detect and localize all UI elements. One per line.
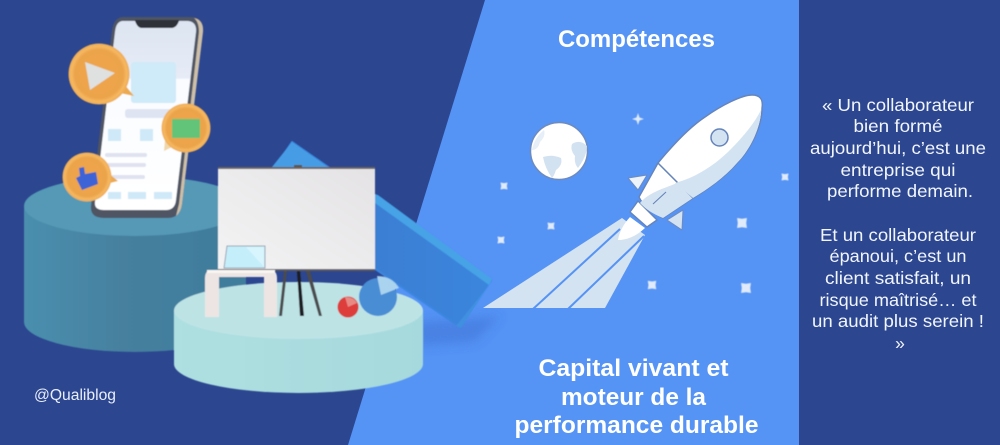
fins xyxy=(628,175,647,190)
heading: Capital vivant et moteur de la performance durable xyxy=(514,355,758,439)
panel: quote navy column xyxy=(799,0,1000,445)
whiteboard on easel xyxy=(218,165,375,316)
mint cylinder platform xyxy=(174,282,423,393)
flame xyxy=(618,217,645,240)
quote text block: client satisfait, un xyxy=(825,268,971,288)
quote text block: performe demain. xyxy=(827,181,973,201)
quote text block: » xyxy=(895,333,905,353)
heading: Capital vivant et moteur de la performance durable: performance durable xyxy=(514,412,758,439)
exhaust trails xyxy=(483,218,645,309)
window xyxy=(711,129,728,146)
illustration: planet earth xyxy=(530,122,588,180)
heading: Capital vivant et moteur de la performance durable: moteur de la xyxy=(561,384,707,411)
heading: Compétences: Compétences xyxy=(558,26,715,53)
heading: Capital vivant et moteur de la performance durable: Capital vivant et xyxy=(538,355,728,382)
label: @Qualiblog: @Qualiblog xyxy=(34,387,116,404)
icon: thumbs-up bubble xyxy=(62,152,118,202)
illustration: rocket xyxy=(483,95,762,309)
quote text block: épanoui, c’est un xyxy=(830,246,966,266)
quote text block: « Un collaborateur xyxy=(822,95,974,115)
quote text block: un audit plus serein ! xyxy=(812,311,984,331)
illustration: 3D training scene xyxy=(24,17,500,393)
lower body xyxy=(639,163,693,218)
upper body xyxy=(658,95,762,198)
icon: mail bubble xyxy=(162,104,210,152)
decorative stars xyxy=(494,113,792,298)
quote text block: bien formé xyxy=(854,116,942,136)
quote text block: Et un collaborateur xyxy=(820,225,976,245)
teal cylinder platform xyxy=(24,176,246,352)
white desk with laptop xyxy=(205,246,277,317)
quote text block: aujourd’hui, c’est une xyxy=(810,138,986,158)
quote text block xyxy=(810,95,986,353)
smartphone xyxy=(91,17,203,218)
nozzle xyxy=(630,201,657,227)
panel: bright blue skills panel xyxy=(348,0,799,445)
blue pie chart xyxy=(359,276,399,316)
red pie ball xyxy=(338,296,358,318)
tilted blue bar xyxy=(260,142,500,346)
quote text block: risque maîtrisé… et xyxy=(820,290,977,310)
icon: play bubble xyxy=(68,44,134,104)
quote text block: entreprise qui xyxy=(840,160,956,180)
